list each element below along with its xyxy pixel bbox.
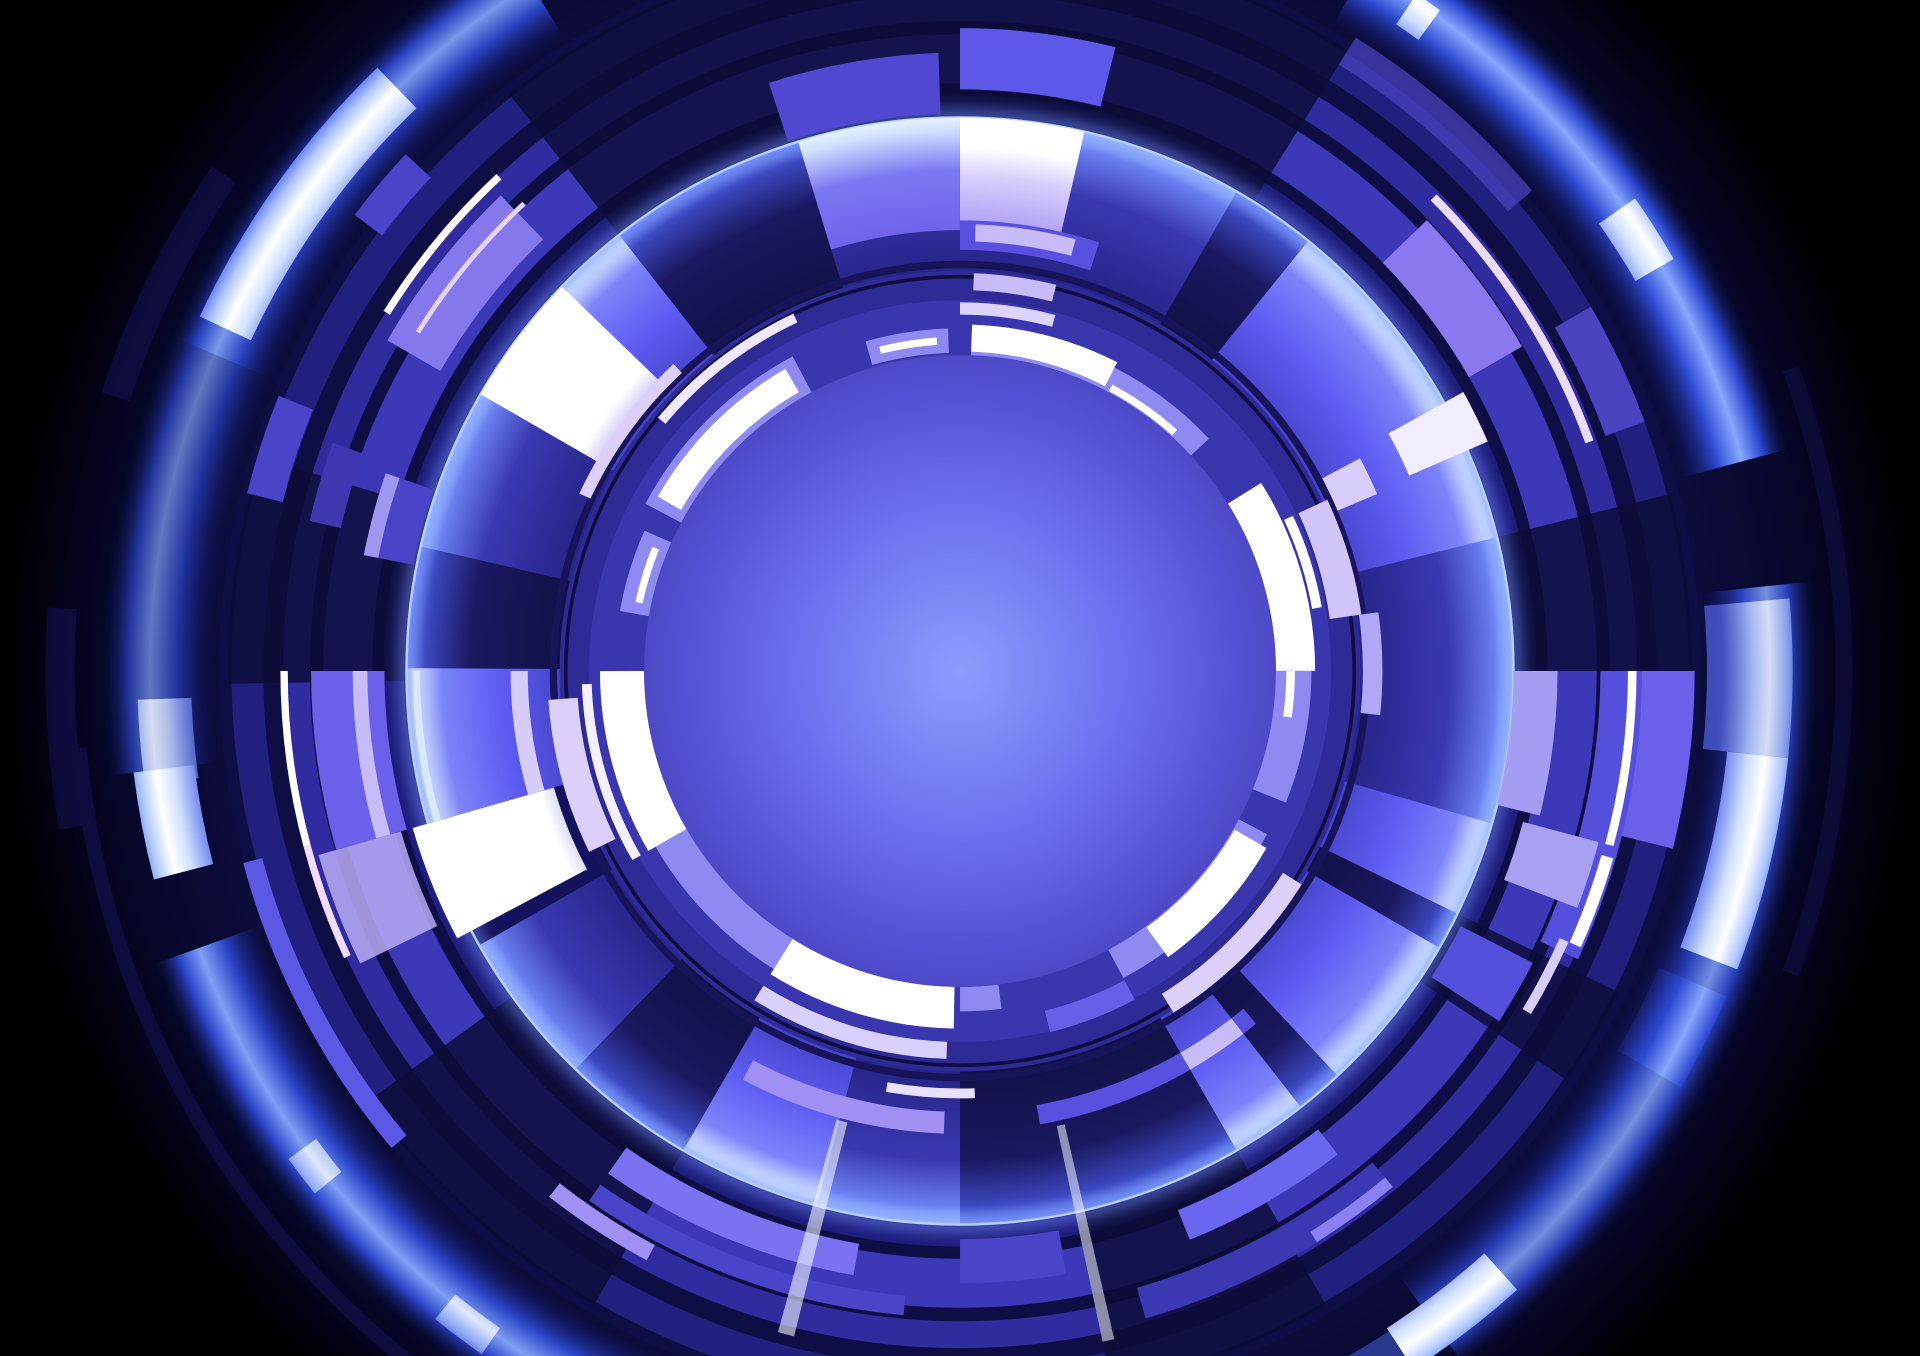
inner lilac arcs: [548, 220, 1382, 1134]
central disc: [644, 355, 1276, 987]
inner dark guide rings: [553, 264, 1367, 1078]
thin radial light lines: [778, 1120, 1114, 1342]
collar white arcs: [600, 324, 1316, 1028]
thin bright ring: [407, 118, 1513, 1224]
white and lilac sectors: [318, 118, 1488, 964]
main band wedges between collar and thin ring: [408, 118, 1512, 1224]
lilac blocks in the middle rings: [243, 0, 1695, 1318]
dark halo behind the rings: [482, 193, 1438, 1149]
dark wedges over middle rings: [228, 0, 1692, 1356]
collar periwinkle segments: [620, 328, 1312, 1012]
collar base around the disc: [617, 328, 1303, 1014]
left wedge below the horizon: [412, 671, 544, 822]
middle rings base: [247, 0, 1673, 1356]
